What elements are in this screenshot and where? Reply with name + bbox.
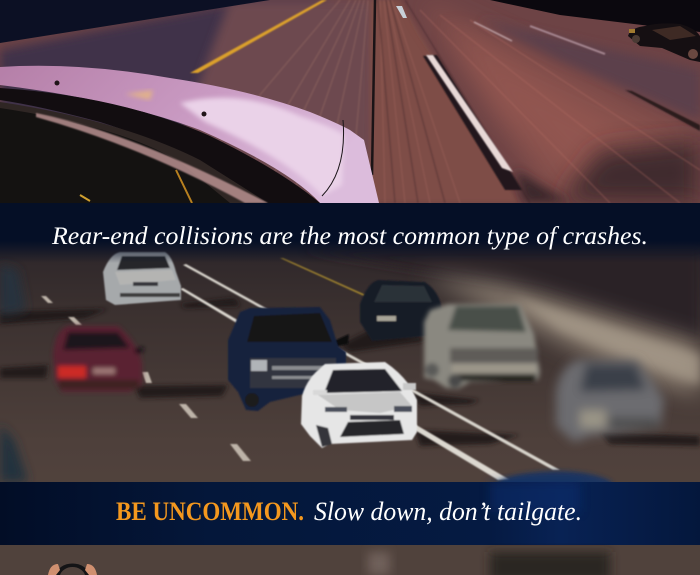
car: dark sedan (360, 280, 442, 341)
white dashes (423, 55, 522, 190)
yellow lane line (190, 0, 327, 73)
center seam (372, 0, 375, 175)
callout: be uncommon: BE UNCOMMON. (116, 497, 304, 526)
windshield (0, 88, 320, 203)
panel: traffic photo (0, 245, 700, 482)
car: dark far left (0, 264, 26, 316)
road surface, left purple section (0, 0, 319, 128)
distant car (628, 23, 700, 62)
road surface, right warm section (420, 0, 700, 203)
car shadows (0, 298, 700, 446)
callout: be uncommon: Slow down, don’t tailgate. (314, 497, 582, 526)
panel: next section strip (0, 545, 700, 575)
car: red left (53, 326, 144, 392)
panel: top caption band (0, 203, 700, 263)
car: silver left (103, 252, 181, 305)
car: blurred foreground blue (496, 468, 614, 482)
panel: speeding highway photo (0, 0, 700, 203)
heading: rear-end collisions: Rear-end collisions are the most common type of crashes. (51, 223, 648, 250)
car: white sedan (301, 362, 417, 448)
lane lines (183, 264, 560, 470)
car: blue pickup (228, 307, 349, 411)
car: blurred foreground left (0, 425, 28, 482)
dark verge (0, 0, 270, 43)
icon: hands on steering wheel (48, 564, 97, 575)
car: silver pickup (424, 304, 540, 389)
panel: bottom caption band (0, 482, 700, 545)
car: grey far right (556, 360, 664, 442)
icon: car hood (0, 66, 379, 203)
road speed streaks (205, 0, 700, 203)
